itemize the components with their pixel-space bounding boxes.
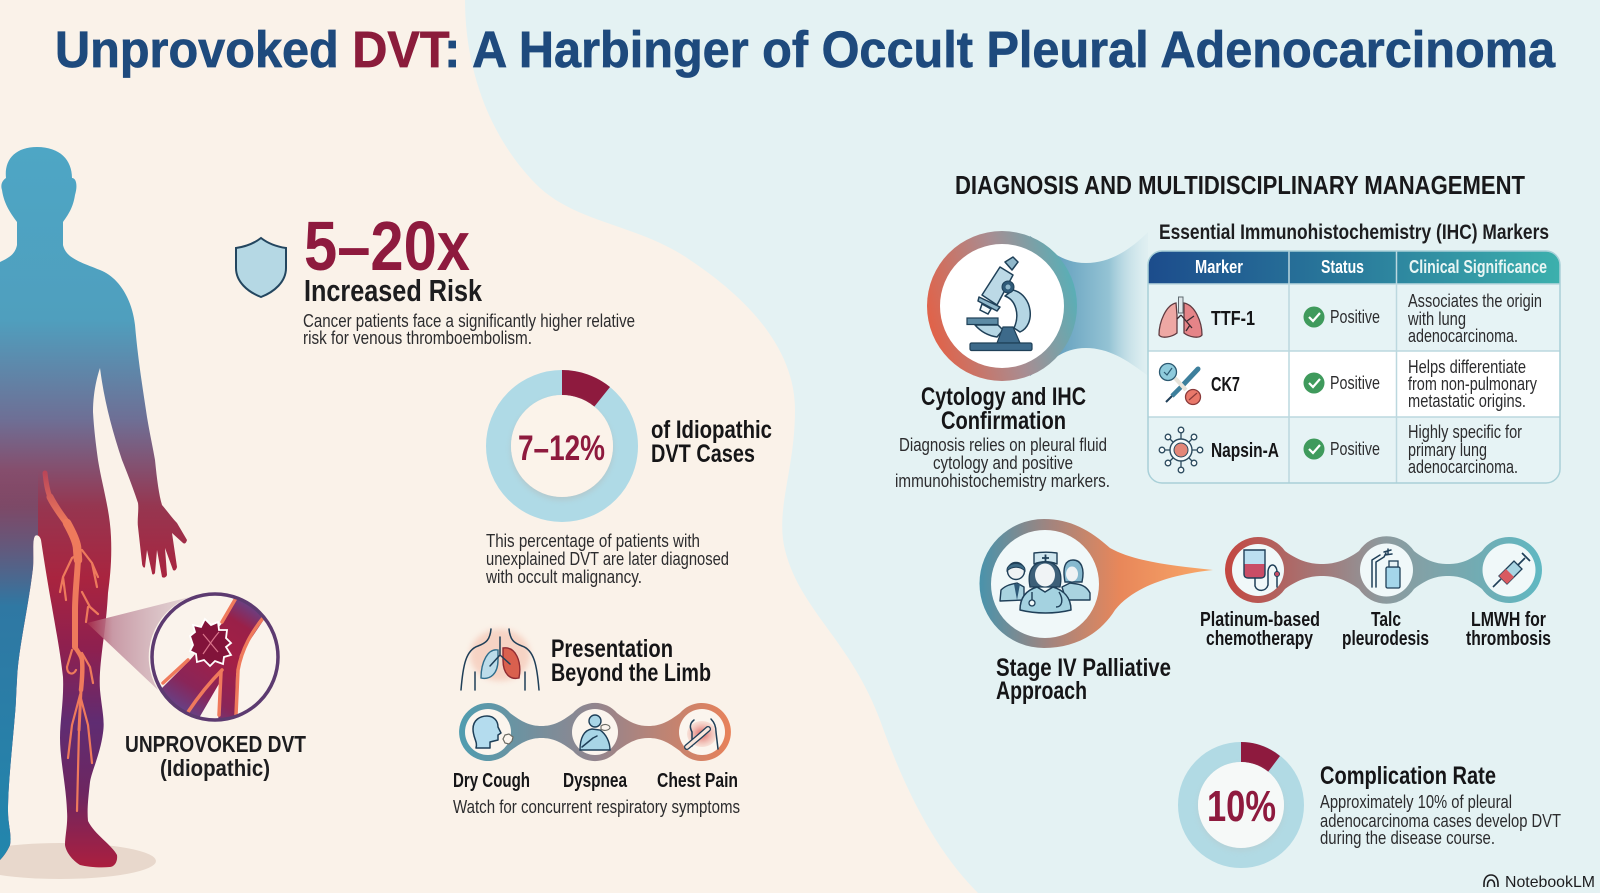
header row: Marker xyxy=(1195,257,1243,277)
body silhouette xyxy=(0,140,200,880)
heading: increased risk: Increased Risk xyxy=(304,273,483,308)
panel: complication rate xyxy=(1188,742,1561,858)
icon: lungs xyxy=(1159,297,1202,337)
heading: stage IV: Stage IV Palliative xyxy=(996,654,1171,682)
panel: stage IV palliative approach xyxy=(980,519,1551,705)
labels: treatments: pleurodesis xyxy=(1342,628,1429,650)
icon: dyspnea xyxy=(580,715,610,750)
center nurse xyxy=(1020,552,1071,613)
text: percentage explanation: unexplained DVT are later diagnosed xyxy=(486,549,729,569)
text: percentage explanation: This percentage of patients with xyxy=(486,531,700,551)
header row xyxy=(1195,257,1547,277)
text: diagnosis description: Diagnosis relies on pleural fluid xyxy=(899,435,1107,455)
background: cream wave xyxy=(0,0,978,893)
left doctor xyxy=(1000,562,1025,601)
icon: chest pain xyxy=(687,719,718,749)
heading: complication rate: Complication Rate xyxy=(1320,762,1496,790)
row: TTF-1: adenocarcinoma. xyxy=(1408,326,1518,346)
labels: symptoms: Dyspnea xyxy=(563,770,628,792)
right nurse xyxy=(1062,560,1090,600)
row: TTF-1: Associates the origin xyxy=(1408,291,1542,311)
icon: chest with lungs xyxy=(461,629,539,690)
heading: presentation beyond the limb: Presentation xyxy=(551,635,673,663)
labels: treatments: Talc xyxy=(1371,609,1401,631)
status check xyxy=(1304,306,1324,328)
heading: cytology and IHC: Cytology and IHC xyxy=(921,383,1086,411)
heading: cytology and IHC: Confirmation xyxy=(941,407,1066,435)
icon: cell xyxy=(1159,427,1203,473)
labels: treatments: LMWH for xyxy=(1471,609,1546,631)
text: diagnosis description: immunohistochemistry markers. xyxy=(895,471,1110,491)
heading: stage IV xyxy=(996,654,1171,705)
title: Unprovoked DVT: A Harbinger of Occult Pleural Adenocarcinoma xyxy=(55,21,1556,78)
row: TTF-1 xyxy=(1159,291,1542,346)
icon: dry cough xyxy=(473,716,513,748)
row: Napsin-A xyxy=(1159,422,1522,477)
text: risk description xyxy=(303,311,635,348)
panel: idiopathic DVT share xyxy=(485,370,772,587)
heading: stage IV: Approach xyxy=(996,677,1087,705)
header row: Status xyxy=(1321,257,1364,277)
row: TTF-1: with lung xyxy=(1407,309,1466,329)
donut chart: 7-12% xyxy=(498,370,626,510)
magnified clot lens xyxy=(151,593,279,725)
donut chart: 7-12%: 7–12% xyxy=(518,429,605,468)
treatment chain xyxy=(1225,536,1542,604)
labels: treatments: thrombosis xyxy=(1466,628,1551,650)
panel: presentation beyond the limb xyxy=(453,629,740,817)
text: risk description: Cancer patients face a significantly higher relative xyxy=(303,311,635,331)
text: percentage explanation: with occult malignancy. xyxy=(485,567,642,587)
donut chart: 10% xyxy=(1188,742,1294,858)
status check xyxy=(1304,372,1324,394)
row: Napsin-A: adenocarcinoma. xyxy=(1408,457,1518,477)
text: watch note: Watch for concurrent respiratory symptoms xyxy=(453,797,740,817)
text: percentage explanation xyxy=(485,531,729,587)
symptom chain xyxy=(459,703,731,761)
label: unprovoked DVT: UNPROVOKED DVT xyxy=(125,731,306,757)
heading: cytology and IHC xyxy=(921,383,1086,435)
text: risk description: risk for venous thromboembolism. xyxy=(303,328,532,348)
row: Napsin-A: primary lung xyxy=(1408,440,1487,460)
icon: microscope xyxy=(927,231,1077,381)
magnifier cone xyxy=(87,597,190,690)
row: CK7: Positive xyxy=(1330,373,1380,393)
row: CK7 xyxy=(1160,357,1537,411)
label: unprovoked DVT xyxy=(125,731,306,781)
stat: 5-20x: 5–20x xyxy=(304,207,470,285)
labels: symptoms xyxy=(453,770,738,792)
heading: of idiopathic DVT cases: DVT Cases xyxy=(651,440,755,468)
text: complication description: Approximately 10% of pleural xyxy=(1320,792,1512,812)
logo: NotebookLM: NotebookLM xyxy=(1505,874,1595,891)
icon: pipette and tests xyxy=(1160,364,1200,404)
labels: treatments xyxy=(1200,609,1551,650)
table xyxy=(1148,251,1560,483)
heading: of idiopathic DVT cases: of Idiopathic xyxy=(651,416,772,444)
row: TTF-1: Positive xyxy=(1330,307,1380,327)
floor shadow xyxy=(0,843,156,879)
header row: Clinical Significance xyxy=(1409,257,1547,277)
labels: treatments: chemotherapy xyxy=(1206,628,1314,650)
row: CK7: CK7 xyxy=(1211,374,1240,396)
row: CK7: from non-pulmonary xyxy=(1408,374,1537,394)
panel: IHC markers table xyxy=(1148,221,1560,483)
text: diagnosis description xyxy=(895,435,1110,491)
panel: body figure with DVT xyxy=(0,140,306,880)
icon: shield xyxy=(236,238,286,297)
label: unprovoked DVT: (Idiopathic) xyxy=(160,755,270,781)
row: Napsin-A: Highly specific for xyxy=(1408,422,1522,442)
leg veins xyxy=(45,473,98,811)
icon: talc tube and bottle xyxy=(1372,549,1400,588)
donut chart: 10%: 10% xyxy=(1207,782,1276,831)
row: CK7: Helps differentiate xyxy=(1408,357,1526,377)
text: complication description: during the disease course. xyxy=(1320,828,1495,848)
icon: syringe xyxy=(1493,553,1530,587)
row: CK7: metastatic origins. xyxy=(1408,391,1526,411)
text: diagnosis description: cytology and positive xyxy=(933,453,1073,473)
panel: increased risk xyxy=(236,207,635,348)
labels: treatments: Platinum-based xyxy=(1200,609,1320,631)
row: Napsin-A: Napsin-A xyxy=(1211,440,1279,462)
icon: care team xyxy=(980,519,1213,648)
row: Napsin-A: Positive xyxy=(1330,439,1380,459)
heading: of idiopathic DVT cases xyxy=(651,416,772,468)
labels: symptoms: Chest Pain xyxy=(657,770,738,792)
funnel to table xyxy=(1030,232,1148,376)
panel: cytology and IHC xyxy=(895,231,1148,491)
row: TTF-1: TTF-1 xyxy=(1211,308,1255,330)
heading: presentation beyond the limb: Beyond the Limb xyxy=(551,659,711,687)
status check xyxy=(1304,438,1324,460)
text: complication description xyxy=(1320,792,1561,848)
icon: IV bag xyxy=(1244,550,1280,590)
heading: presentation beyond the limb xyxy=(551,635,711,687)
labels: symptoms: Dry Cough xyxy=(453,770,530,792)
